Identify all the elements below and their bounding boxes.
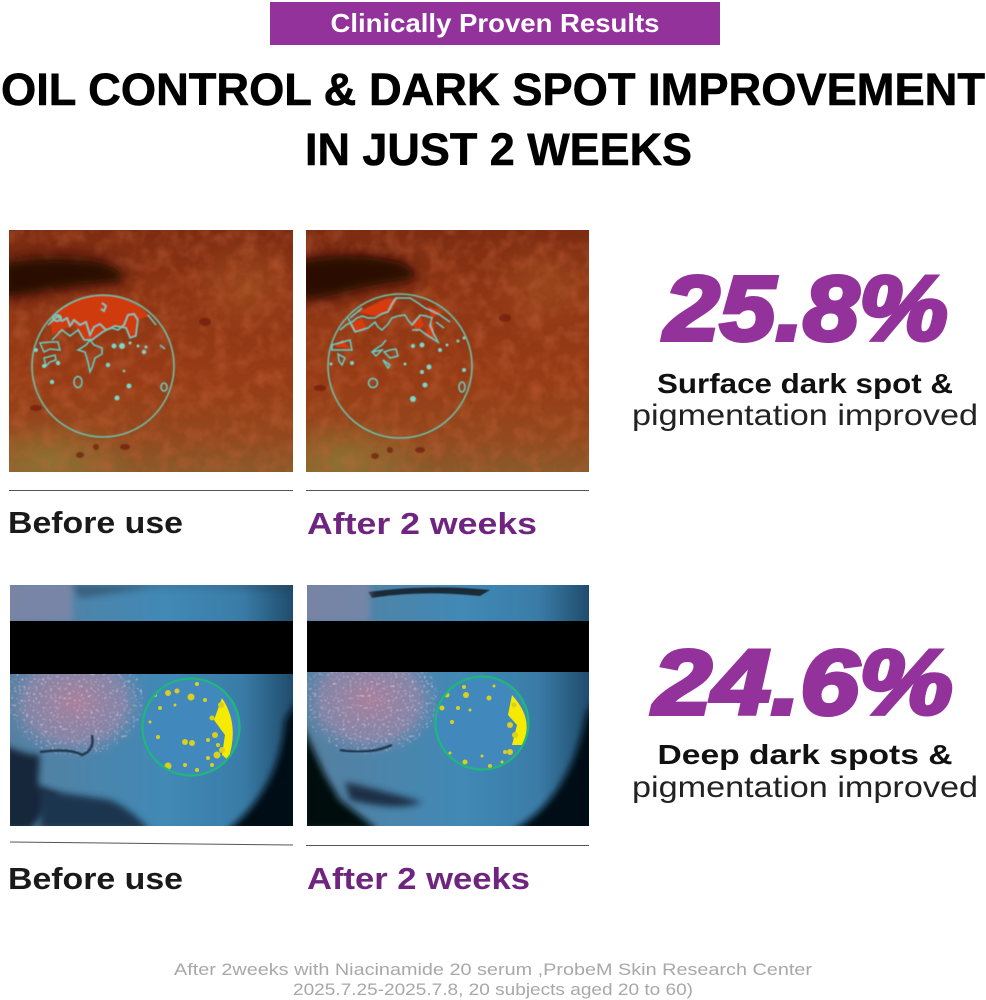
banner: Clinically Proven Results: Clinically Proven Results <box>330 8 660 38</box>
stat: 24.6% deep: pigmentation improved <box>632 771 978 804</box>
caption: before use: Before use <box>8 505 183 540</box>
stat: 25.8% surface: Surface dark spot & <box>657 368 953 399</box>
caption: after 2 weeks: After 2 weeks <box>307 861 530 896</box>
photo: deep dark spots before use <box>0 582 298 832</box>
stat: 25.8% surface: pigmentation improved <box>632 399 978 432</box>
title: OIL CONTROL & DARK SPOT IMPROVEMENT <box>1 64 985 115</box>
photo: deep dark spots after 2 weeks <box>295 582 595 832</box>
stat: 24.6% deep: 24.6% <box>651 632 953 734</box>
title: IN JUST 2 WEEKS <box>305 124 692 175</box>
footnote: 2025.7.25-2025.7.8, 20 subjects aged 20 to 60) <box>293 980 693 999</box>
title <box>1 64 985 175</box>
stat: 24.6% deep: Deep dark spots & <box>658 739 952 770</box>
banner: Clinically Proven Results <box>270 2 720 45</box>
stat: 24.6% deep <box>632 632 978 804</box>
photo: surface dark spots after 2 weeks <box>306 230 589 472</box>
caption: before use <box>8 842 293 896</box>
footnote <box>174 960 812 999</box>
stat: 25.8% surface <box>632 258 978 432</box>
caption: after 2 weeks: After 2 weeks <box>307 506 537 541</box>
photo: surface dark spots before use <box>9 230 293 472</box>
footnote: After 2weeks with Niacinamide 20 serum ,ProbeM Skin Research Center <box>174 960 812 979</box>
stat: 25.8% surface: 25.8% <box>662 258 948 360</box>
caption: before use: Before use <box>8 861 183 896</box>
